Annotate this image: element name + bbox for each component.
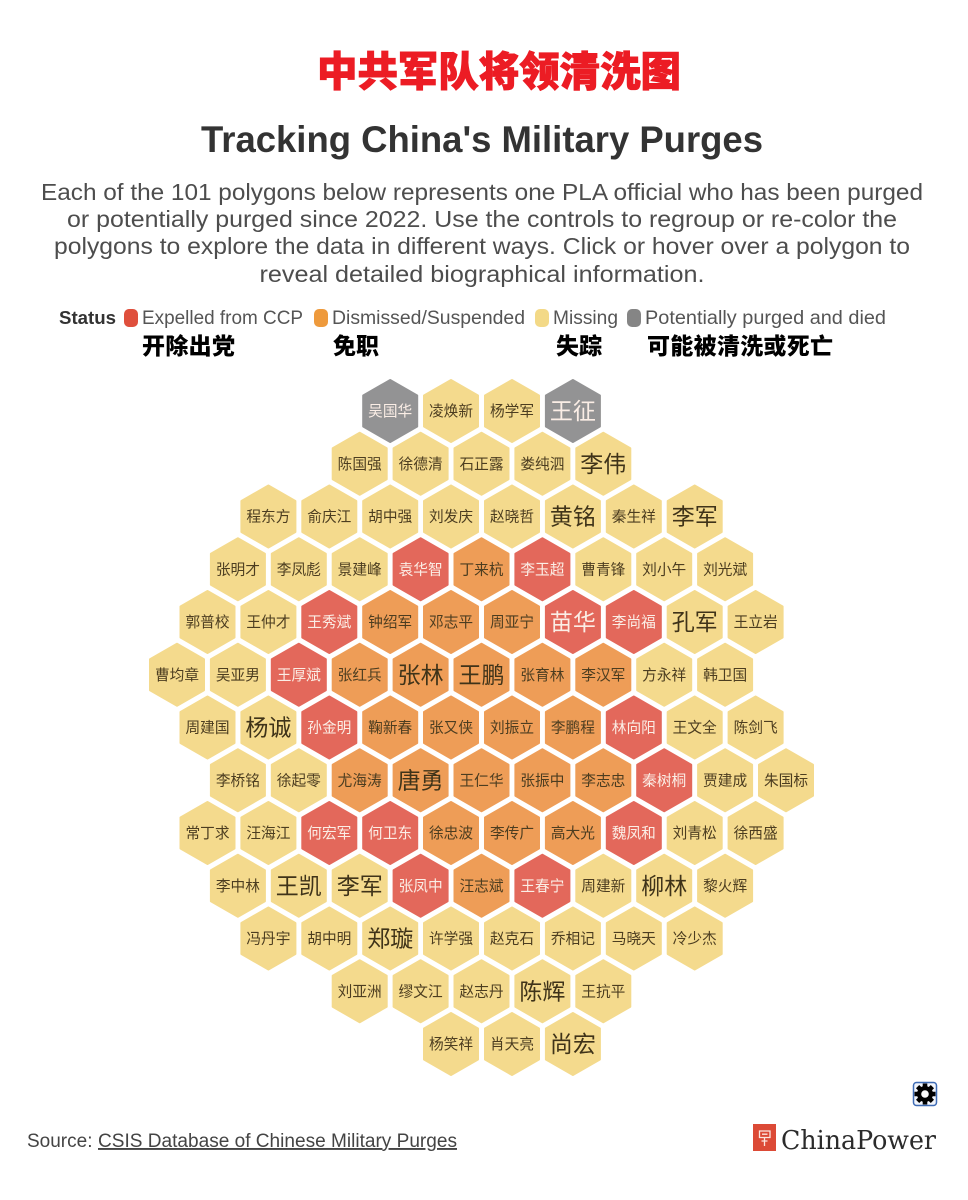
hex: 李鹏程 [546,696,600,758]
hex: 尤海涛: 尤海涛 [338,769,382,790]
hex: 张红兵 [333,644,387,706]
hex: 常丁求: 常丁求 [185,822,230,843]
hex: 丁来杭: 丁来杭 [459,558,504,579]
hex: 张红兵: 张红兵 [338,664,382,685]
hex: 刘亚洲: 刘亚洲 [338,980,382,1001]
hex: 杨笑祥: 杨笑祥 [429,1033,473,1054]
legend item: dismissed: Dismissed/Suspended [332,308,525,329]
hex: 赵志丹 [454,960,508,1022]
intro paragraph: Each of the 101 polygons below represents one PLA official who has been purged [41,179,923,205]
hex: 黄铭 [546,486,600,548]
hex: 娄纯泗 [515,433,569,495]
hex: 徐西盛 [729,802,783,864]
hex: 孙金明: 孙金明 [307,716,351,738]
hex: 缪文江: 缪文江 [399,980,443,1001]
legend: status [59,308,886,361]
hex: 徐忠波: 徐忠波 [429,822,473,843]
hex: 尤海涛 [333,749,387,811]
hex: 吴国华: 吴国华 [368,400,412,421]
hex: 韩卫国: 韩卫国 [703,664,747,685]
hex: 李志忠: 李志忠 [581,769,625,790]
hex: 李桥铭: 李桥铭 [216,769,260,790]
hex: 许学强 [424,908,478,970]
hex: 丁来杭 [454,538,508,600]
hex: 陈剑飞 [729,696,783,758]
hex: 韩卫国 [698,644,752,706]
hex: 徐德清: 徐德清 [399,453,443,474]
hex: 王秀斌: 王秀斌 [307,611,352,632]
hex: 王征: 王征 [550,392,596,426]
hex: 吴亚男: 吴亚男 [216,664,260,685]
hex: 曹青锋 [576,538,630,600]
hex: 刘亚洲 [333,960,387,1022]
hex: 刘光斌: 刘光斌 [703,558,747,579]
hex: 周建国: 周建国 [185,716,230,738]
hex: 陈国强: 陈国强 [338,453,382,474]
hex: 刘发庆: 刘发庆 [429,506,473,526]
hex: 郭普校 [180,591,234,653]
hex: 常丁求 [180,802,234,864]
hex: 黎火辉: 黎火辉 [703,875,747,896]
intro paragraph: polygons to explore the data in different ways. Click or hover over a polygon to [54,233,910,259]
hex: 胡中明 [302,908,356,970]
hex: 张振中: 张振中 [520,769,564,790]
hex: 秦树桐 [637,749,691,811]
legend item: missing: 失踪 [556,327,602,361]
hex: 钟绍军: 钟绍军 [368,611,412,632]
hex: 缪文江 [394,960,448,1022]
hex: 孔军: 孔军 [672,603,718,637]
hex: 方永祥 [637,644,691,706]
hex: 汪志斌 [454,855,508,917]
hex: 曹青锋: 曹青锋 [581,558,626,579]
hex: 陈国强 [333,433,387,495]
hex: 程东方 [241,486,295,548]
hex: 汪海江 [241,802,295,864]
hex: 刘青松: 刘青松 [673,822,717,843]
hex: 杨笑祥 [424,1013,478,1075]
hex: 鞠新春 [363,696,417,758]
hex: 柳林: 柳林 [641,867,687,901]
hex: 李军: 李军 [672,498,718,532]
hex: 景建峰: 景建峰 [338,558,382,579]
hex: 赵晓哲 [485,486,539,548]
hex: 鞠新春: 鞠新春 [368,716,413,738]
hex: 周亚宁 [485,591,539,653]
hex: 李凤彪: 李凤彪 [277,558,321,579]
hex: 肖天亮 [485,1013,539,1075]
hex: 王鹏 [454,644,508,706]
hex: 李中林 [211,855,265,917]
legend item: expelled: Expelled from CCP [142,308,303,329]
hex: 胡中强: 胡中强 [368,506,413,526]
hex: 陈剑飞: 陈剑飞 [734,716,778,738]
hex: 李汉军: 李汉军 [581,664,625,685]
hex: 王立岩 [729,591,783,653]
hex: 凌焕新 [424,380,478,442]
hex: 李志忠 [576,749,630,811]
hex: 张又侠: 张又侠 [429,716,473,738]
hex: 赵志丹: 赵志丹 [459,980,504,1001]
hex: 孔军 [668,591,722,653]
hex: 李玉超 [515,538,569,600]
hex: 李尚福: 李尚福 [612,611,656,632]
hex: 袁华智 [394,538,448,600]
hex: 高大光: 高大光 [551,822,595,843]
title: Chinese: 中共军队将领清洗图 [317,38,681,98]
hex: 杨学军 [485,380,539,442]
hex: 乔相记: 乔相记 [551,928,595,948]
legend item: expelled [124,308,303,361]
hex: 钟绍军 [363,591,417,653]
hex: 陈辉: 陈辉 [519,972,565,1006]
hex: 李伟: 李伟 [580,445,626,479]
hex: 尚宏: 尚宏 [550,1025,596,1059]
hex: 王秀斌 [302,591,356,653]
hex: 邓志平: 邓志平 [429,611,473,632]
hex: 李传广 [485,802,539,864]
hex: 赵晓哲: 赵晓哲 [490,506,534,526]
hex: 刘青松 [668,802,722,864]
hex: 张明才 [211,538,265,600]
hex: 王立岩: 王立岩 [734,611,778,632]
hex: 徐德清 [394,433,448,495]
hex: 王厚斌 [272,644,326,706]
hex: 刘小午 [637,538,691,600]
hex: 冷少杰: 冷少杰 [673,928,717,948]
hex: 娄纯泗: 娄纯泗 [520,453,564,474]
hex: 杨诚 [241,696,295,758]
hex: 杨学军: 杨学军 [490,400,534,421]
hex: 刘振立 [485,696,539,758]
hex: 郭普校: 郭普校 [185,611,230,632]
hex: 李玉超: 李玉超 [520,558,565,579]
hex: 袁华智: 袁华智 [399,558,443,579]
hex: 李汉军 [576,644,630,706]
hex: 黄铭: 黄铭 [550,498,596,532]
hex: 张凤中: 张凤中 [399,875,443,896]
hex: 林向阳 [607,696,661,758]
hex: 高大光 [546,802,600,864]
hex: 郑璇 [363,908,417,970]
hex: 唐勇 [394,749,448,811]
hex: 张林: 张林 [398,656,444,690]
hex: 王厚斌: 王厚斌 [277,664,321,685]
hex: 黎火辉 [698,855,752,917]
hex: 徐起零: 徐起零 [277,769,321,790]
hex: 贾建成 [698,749,752,811]
legend item: missing [535,308,618,361]
hex: 胡中强 [363,486,417,548]
hex: 王征 [546,380,600,442]
hex: 王仲才 [241,591,295,653]
hex: 魏凤和 [607,802,661,864]
hex: 冯丹宇: 冯丹宇 [246,928,290,948]
hex: 王抗平: 王抗平 [581,980,625,1001]
hex: 杨诚: 杨诚 [245,708,291,742]
hex: 石正露: 石正露 [459,453,504,474]
hex: 王抗平 [576,960,630,1022]
hex: 凌焕新: 凌焕新 [429,400,473,421]
hex: 李传广: 李传广 [490,822,534,843]
legend item: missing: Missing [553,308,618,329]
hex: 刘发庆 [424,486,478,548]
hex: 朱国标: 朱国标 [764,769,808,790]
source line: Source: [27,1131,98,1152]
logo: ChinaPower: ChinaPower [781,1126,937,1156]
hex: 张育林: 张育林 [520,664,565,685]
hex: 王仁华: 王仁华 [459,769,504,790]
hex: 俞庆江 [302,486,356,548]
hex: 王仲才: 王仲才 [246,611,290,632]
hex: 何宏军: 何宏军 [307,822,351,843]
hex: 徐起零 [272,749,326,811]
hex: 吴国华 [363,380,417,442]
hex: 李中林: 李中林 [216,875,260,896]
hex: 秦树桐: 秦树桐 [642,769,686,790]
hex: 周建新 [576,855,630,917]
hex: 秦生祥 [607,486,661,548]
hex: 汪志斌: 汪志斌 [459,875,504,896]
hex: 石正露 [454,433,508,495]
hex: 邓志平 [424,591,478,653]
hex: 赵克石: 赵克石 [490,928,534,948]
source line: CSIS Database of Chinese Military Purges [98,1131,457,1152]
hexagon chart: 101 officials [150,380,813,1075]
hex: 李军 [333,855,387,917]
hex: 赵克石 [485,908,539,970]
hex: 刘振立: 刘振立 [490,716,534,738]
hex: 何宏军 [302,802,356,864]
hex: 王文全: 王文全 [673,716,717,738]
hex: 贾建成: 贾建成 [703,769,747,790]
hex: 刘光斌 [698,538,752,600]
hex: 李伟 [576,433,630,495]
hex: 张明才: 张明才 [216,558,260,579]
hex: 方永祥: 方永祥 [642,664,687,685]
hex: 张振中 [515,749,569,811]
hex: 李鹏程: 李鹏程 [551,716,595,738]
hex: 王文全 [668,696,722,758]
hex: 徐西盛: 徐西盛 [734,822,778,843]
hex: 柳林 [637,855,691,917]
hex: 王仁华 [454,749,508,811]
hex: 唐勇: 唐勇 [398,761,444,795]
legend item: potentially purged: Potentially purged and died [645,308,886,329]
hex: 汪海江: 汪海江 [246,822,291,843]
legend item: potentially purged [627,308,886,361]
hex: 朱国标 [759,749,813,811]
hex: 胡中明: 胡中明 [307,928,351,948]
hex: 郑璇: 郑璇 [367,920,413,954]
hex: 张林 [394,644,448,706]
hex: 孙金明 [302,696,356,758]
hex: 乔相记 [546,908,600,970]
legend item: dismissed [314,308,525,361]
hex: 张凤中 [394,855,448,917]
hex: 王春宁: 王春宁 [520,875,564,896]
hex: 魏凤和: 魏凤和 [612,822,656,843]
hex: 俞庆江: 俞庆江 [307,506,352,526]
hex: 周建国 [180,696,234,758]
hex: 张又侠 [424,696,478,758]
hex: 程东方: 程东方 [246,506,290,526]
hex: 周建新: 周建新 [581,875,626,896]
hex: 王春宁 [515,855,569,917]
hex: 曹均章 [150,644,204,706]
hex: 刘小午: 刘小午 [642,558,686,579]
title: English: Tracking China's Military Purges [201,119,763,160]
legend title: Status [59,308,116,328]
hex: 李军 [668,486,722,548]
hex: 许学强: 许学强 [429,928,473,948]
legend item: dismissed: 免职 [333,327,379,361]
legend item: potentially purged: 可能被清洗或死亡 [647,327,833,361]
hex: 尚宏 [546,1013,600,1075]
hex: 林向阳: 林向阳 [612,716,656,738]
hex: 何卫东: 何卫东 [368,822,412,843]
hex: 王凯: 王凯 [276,867,322,901]
intro paragraph: or potentially purged since 2022. Use the controls to regroup or re-color the [67,206,897,232]
hex: 景建峰 [333,538,387,600]
hex: 李军: 李军 [337,867,383,901]
hex: 李凤彪 [272,538,326,600]
hex: 冷少杰 [668,908,722,970]
hex: 李桥铭 [211,749,265,811]
hex: 冯丹宇 [241,908,295,970]
hex: 曹均章: 曹均章 [155,664,199,685]
intro paragraph: reveal detailed biographical information. [260,261,704,287]
hex: 陈辉 [515,960,569,1022]
hex: 李尚福 [607,591,661,653]
hex: 张育林 [515,644,569,706]
hex: 肖天亮: 肖天亮 [490,1033,534,1054]
legend item: expelled: 开除出党 [142,327,235,361]
hex: 徐忠波 [424,802,478,864]
hex: 苗华 [546,591,600,653]
hex: 王鹏: 王鹏 [458,656,504,690]
hex: 马晓天 [607,908,661,970]
hex: 王凯 [272,855,326,917]
hex: 秦生祥: 秦生祥 [612,506,656,526]
hex: 马晓天: 马晓天 [612,928,656,948]
intro paragraph [41,179,923,287]
hex: 吴亚男 [211,644,265,706]
hex: 何卫东 [363,802,417,864]
hex: 周亚宁: 周亚宁 [490,611,534,632]
hex: 苗华: 苗华 [550,603,596,637]
icon: settings gear [914,1082,936,1106]
